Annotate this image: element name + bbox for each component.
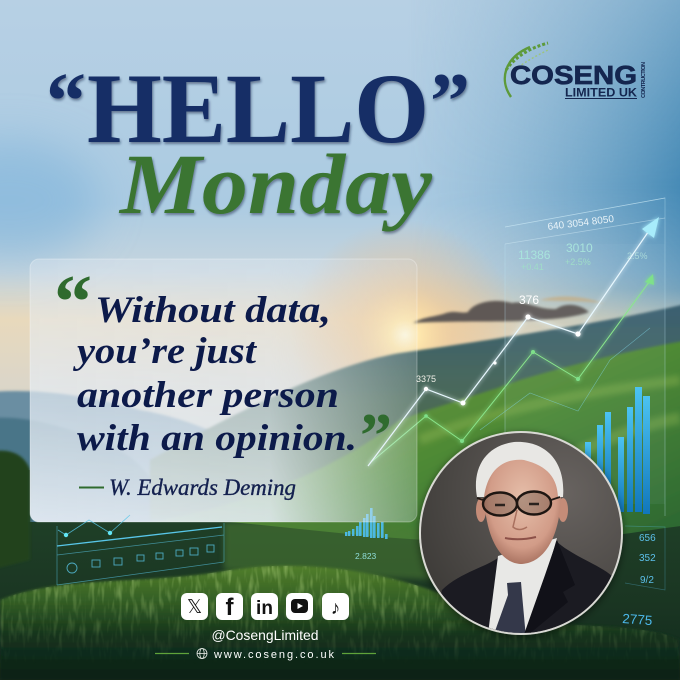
icon: globe — [197, 648, 207, 658]
quote text: another person — [77, 374, 339, 415]
logo: Coseng Limited UK: COSENG — [510, 62, 637, 90]
attribution: W. Edwards Deming — [109, 475, 296, 500]
cloud band — [413, 297, 605, 323]
icon: YouTube — [286, 593, 313, 620]
quote text: you’re just — [73, 330, 258, 371]
icon: X: 𝕏 — [187, 597, 202, 618]
opening quote mark: “ — [54, 260, 92, 344]
portrait — [419, 430, 625, 640]
logo: Coseng Limited UK: LIMITED UK — [565, 88, 638, 100]
quote text — [73, 289, 357, 458]
icon: LinkedIn — [251, 593, 278, 620]
side table numbers — [622, 526, 665, 628]
nose — [513, 510, 527, 530]
social handle: @CosengLimited — [212, 627, 318, 643]
title: HELLO: “ — [46, 58, 86, 146]
tie — [496, 582, 526, 633]
hair — [476, 442, 563, 497]
chart frame — [505, 198, 665, 516]
bar chart — [585, 387, 650, 514]
title: HELLO: HELLO — [87, 53, 429, 164]
icon: X — [181, 593, 208, 620]
glasses — [483, 492, 551, 516]
ears — [476, 498, 486, 522]
quote panel — [30, 259, 417, 522]
side table numbers: 656 — [639, 533, 656, 544]
suit — [441, 541, 612, 633]
chart top numbers: 11386 — [518, 248, 551, 262]
closing quote mark: ” — [360, 400, 392, 471]
chart top numbers: 3010 — [566, 241, 593, 255]
website line — [155, 648, 376, 661]
icon: TikTok — [322, 593, 349, 620]
mouth — [505, 537, 536, 539]
website line: www.coseng.co.uk — [213, 649, 334, 661]
social icons — [181, 593, 349, 621]
green trend line — [370, 274, 654, 463]
chart top numbers: 3375 — [416, 374, 436, 384]
logo: Coseng Limited UK — [505, 43, 647, 100]
icon: LinkedIn: in — [256, 598, 273, 619]
icon: Facebook: f — [226, 594, 234, 621]
lower thin line — [480, 328, 650, 430]
blue trend line with arrow — [368, 217, 659, 466]
small histogram: 2.823 — [355, 551, 377, 561]
icon: Facebook — [216, 593, 243, 621]
side table numbers: 9/2 — [640, 575, 654, 586]
neck and face — [484, 452, 561, 564]
icon: TikTok: ♪ — [331, 598, 340, 619]
quote text: with an opinion. — [77, 417, 357, 458]
logo: Coseng Limited UK: CONTRUCTION — [641, 62, 647, 98]
chart top numbers: +0.41 — [521, 262, 544, 272]
data chart overlay — [345, 198, 665, 628]
chart top numbers: 640 3054 8050 — [547, 214, 615, 233]
chart top numbers — [416, 214, 648, 384]
shirt — [488, 538, 557, 640]
dashboard icons — [67, 545, 214, 573]
title: Monday: Monday — [118, 136, 433, 232]
quote text: Without data, — [95, 289, 331, 330]
chart top numbers: +2.5% — [565, 257, 591, 267]
small histogram — [345, 508, 388, 561]
logo leaf swoosh — [505, 43, 548, 97]
dashboard overlay — [57, 515, 224, 585]
chart top numbers: 376 — [519, 293, 539, 307]
lapels — [524, 540, 575, 633]
side table numbers: 352 — [639, 553, 656, 564]
title: HELLO: ” — [430, 58, 470, 146]
chart top numbers: 2.5% — [627, 251, 648, 261]
side table numbers: 2775 — [622, 611, 653, 628]
